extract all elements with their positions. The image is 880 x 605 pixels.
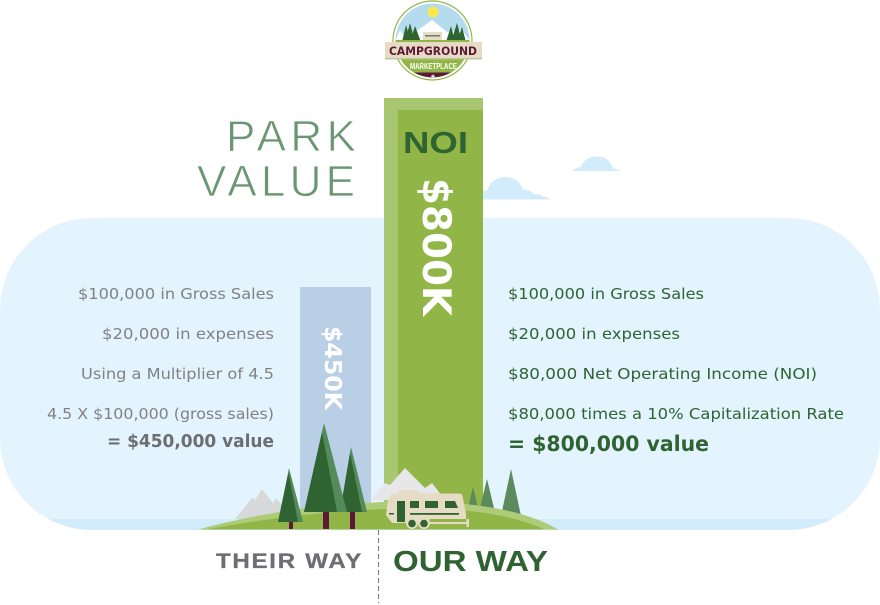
text block: their way calculation: $100,000 in Gross Sales [78, 285, 274, 303]
text block: our way calculation: $80,000 times a 10% Capitalization Rate [508, 405, 844, 423]
green bar: our way [384, 98, 483, 529]
text block: our way calculation [508, 285, 844, 456]
text block: our way calculation: $80,000 Net Operating Income (NOI) [508, 365, 817, 383]
label: our way: OUR WAY [393, 546, 548, 578]
title: park value: VALUE [197, 157, 355, 206]
logo: campground marketplace: CAMPGROUND [389, 44, 477, 58]
text block: their way calculation [47, 285, 274, 452]
label: NOI: NOI [403, 125, 468, 160]
icon: back trees right [468, 469, 521, 516]
divider: dashed line [378, 530, 380, 603]
icon: RV camper [386, 490, 469, 529]
value: $450K: $450K [319, 326, 345, 411]
icon: cloud large [483, 177, 551, 200]
value: $800K: $800K [413, 178, 458, 318]
text block: our way calculation: $100,000 in Gross Sales [508, 285, 704, 303]
text block: their way calculation: = $450,000 value [107, 431, 274, 452]
title: park value [197, 112, 356, 206]
text block: our way calculation: $20,000 in expenses [508, 325, 680, 343]
title: park value: PARK [226, 112, 356, 161]
panel: light blue background [0, 218, 880, 530]
label: their way: THEIR WAY [216, 550, 363, 573]
text block: their way calculation: Using a Multiplier of 4.5 [81, 365, 274, 383]
text block: their way calculation: 4.5 X $100,000 (gross sales) [47, 405, 274, 423]
icon: grey mountains center [370, 468, 445, 500]
icon: grey mountains left [235, 489, 295, 519]
blue bar: their way [300, 287, 371, 522]
hill [198, 502, 558, 530]
text block: their way calculation: $20,000 in expenses [102, 325, 274, 343]
logo: campground marketplace: MARKETPLACE [410, 62, 457, 71]
icon: cloud small [572, 156, 621, 171]
icon: pine trees [278, 423, 367, 529]
logo: campground marketplace [385, 0, 482, 82]
text block: our way calculation: = $800,000 value [508, 432, 709, 456]
